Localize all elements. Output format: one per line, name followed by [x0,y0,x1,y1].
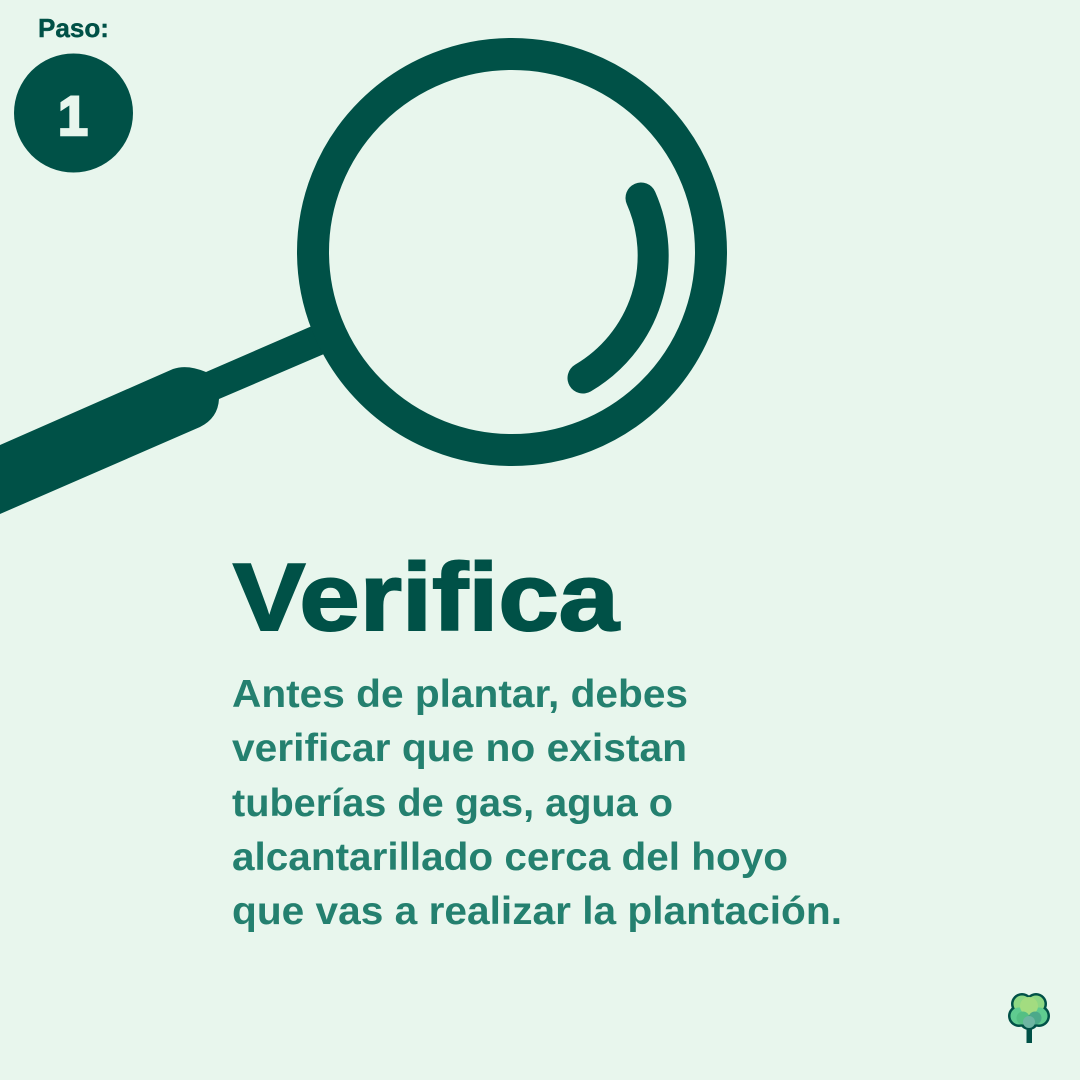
body text: alcantarillado cerca del hoyo [232,836,788,879]
body text: Antes de plantar, debes [232,673,688,716]
icon: tree logo [1008,993,1050,1043]
magnifier handle [0,326,324,514]
body text: tuberías de gas, agua o [232,782,673,825]
body text: que vas a realizar la plantación. [232,890,842,933]
lens glare arc [583,198,653,378]
body text: verificar que no existan [232,727,687,770]
step number badge: 1 [58,84,88,147]
step number badge [14,54,133,172]
magnifier lens ring [313,54,711,450]
title: Verifica [233,544,620,651]
icon: magnifying glass [0,54,711,514]
step label: Paso: [38,13,109,43]
body text [232,673,842,933]
